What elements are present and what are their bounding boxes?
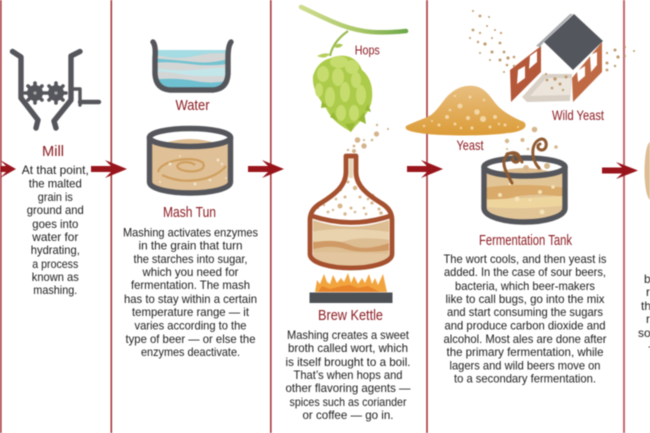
text: brew kettle description: is itself brought to a boil.	[286, 355, 410, 369]
text: mill description: mashing.	[33, 283, 77, 297]
text: fermentation description: to a secondary fermentation.	[454, 372, 596, 386]
text: mash tun description: in the grain that turn	[138, 238, 242, 252]
heading: Wild Yeast: Wild Yeast	[552, 107, 604, 123]
text: mill description	[22, 163, 89, 297]
icon: cropped barrel	[644, 142, 650, 200]
text: mash tun description: has to stay within a certain	[124, 292, 257, 306]
icon: water basin	[150, 42, 235, 90]
text: fermentation description: and start consuming the sugars	[447, 305, 603, 319]
icon: hop vine and cone	[301, 7, 406, 132]
text: mash tun description: type of beer — or else the	[126, 332, 256, 346]
hop particles	[347, 124, 389, 153]
text: brew kettle description: Mashing creates a sweet	[287, 328, 410, 342]
text: mash tun description: fermentation. The mash	[131, 278, 250, 292]
text: mill description: water for	[31, 230, 78, 244]
icon: grain mill	[12, 52, 99, 128]
panel: hops and brew kettle	[286, 7, 410, 422]
text: fermentation description: alcohol. Most ales are done after	[444, 332, 606, 346]
text: mill description: hydrating,	[31, 243, 80, 257]
text: mill description: known as	[32, 270, 79, 284]
icon: yeast pile	[406, 86, 526, 135]
heading: Water: Water	[176, 97, 210, 114]
text: mash tun description: enzymes deactivate.	[141, 345, 240, 359]
text: cropped description: r	[646, 285, 650, 299]
text: mash tun description: which you need for	[142, 265, 238, 279]
text: mill description: goes into	[32, 217, 79, 231]
text: mill description: the malted	[29, 176, 82, 190]
text: cropped description	[638, 272, 650, 353]
text: cropped description: r	[646, 312, 650, 326]
text: brew kettle description: spices such as coriander	[290, 395, 406, 409]
icon: mash tun	[148, 128, 232, 200]
text: fermentation description: added. In the case of sour beers,	[444, 265, 606, 279]
text: brew kettle description: broth called wort, which	[288, 341, 408, 355]
panel: yeast and fermentation	[406, 10, 635, 386]
next panel: cropped barrel and text	[638, 142, 650, 353]
text: mill description: At that point,	[22, 163, 89, 177]
heading: Fermentation Tank: Fermentation Tank	[479, 232, 572, 249]
text: mash tun description: varies according to the	[134, 318, 247, 332]
text: mill description: ground and	[27, 203, 84, 217]
icon: fermentation tank with bugs	[482, 127, 567, 224]
heading: Mash Tun: Mash Tun	[163, 204, 216, 221]
heading: Hops: Hops	[355, 42, 380, 58]
text: brew kettle description: That’s when hops and	[294, 368, 402, 382]
text: mash tun description	[123, 226, 258, 359]
panel: water and mash tun	[123, 42, 258, 359]
text: fermentation description: The wort cools, and then yeast is	[444, 252, 606, 266]
text: fermentation description: lagers and wild beers move on	[450, 358, 600, 372]
heading: Yeast: Yeast	[456, 137, 484, 153]
text: mill description: grain is	[38, 190, 73, 204]
text: brew kettle description: or coffee — go in.	[302, 408, 394, 422]
text: fermentation description: the primary fermentation, while	[446, 345, 604, 359]
text: fermentation description: and produce carbon dioxide and	[444, 318, 606, 332]
text: mash tun description: temperature range — it	[132, 305, 250, 319]
text: brew kettle description	[286, 328, 410, 422]
text: mash tun description: Mashing activates enzymes	[123, 226, 258, 240]
text: mash tun description: the starches into sugar,	[134, 252, 248, 266]
heading: Brew Kettle: Brew Kettle	[318, 307, 383, 324]
wild yeast particles	[469, 10, 635, 91]
icon: wild yeast shed	[510, 14, 603, 102]
text: mill description: a process	[32, 257, 78, 271]
text: fermentation description: bacteria, which beer-makers	[455, 279, 595, 293]
text: fermentation description	[444, 252, 606, 386]
text: brew kettle description: other flavoring agents —	[286, 381, 410, 395]
process arrows	[0, 160, 638, 179]
panel: mill	[12, 52, 99, 297]
heading: Mill: Mill	[42, 143, 64, 160]
icon: brew kettle on burner	[310, 156, 392, 303]
text: fermentation description: like to call bugs, go into the mix	[446, 292, 604, 306]
